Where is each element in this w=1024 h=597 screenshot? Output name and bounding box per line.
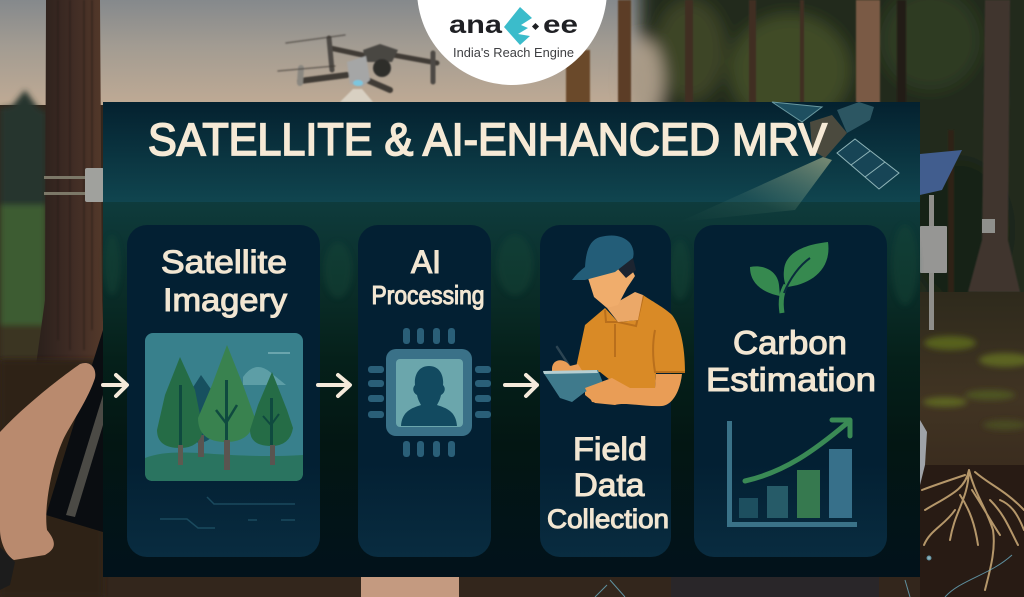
card: satellite imagery [127, 225, 320, 557]
panel forest band [103, 202, 920, 577]
right forest canopy [627, 0, 1024, 305]
cap [572, 235, 634, 280]
icon: seedling [750, 242, 828, 313]
card title: Satellite [161, 244, 287, 280]
circuit lines [160, 497, 295, 528]
face [588, 266, 635, 308]
logo tagline: India's Reach Engine [453, 46, 574, 60]
canopy texture [104, 225, 918, 305]
tablet [543, 370, 603, 402]
card title: Carbon [733, 324, 847, 361]
logo badge [417, 0, 607, 85]
ground left [0, 360, 103, 597]
arrow: to field data [505, 375, 537, 396]
ground right [920, 292, 1024, 472]
drone [278, 35, 437, 102]
card title line 2: Imagery [163, 282, 287, 318]
sky [0, 0, 680, 105]
logo dot [532, 23, 539, 30]
logo icon: teal diamond [504, 7, 532, 45]
soil with roots [920, 465, 1024, 597]
logo badge: ee [543, 11, 578, 39]
bar chart [727, 420, 857, 527]
card subtitle: Processing [372, 280, 484, 310]
card title: AI [411, 244, 441, 280]
left distant forest [0, 90, 46, 360]
card: carbon estimation [694, 225, 887, 557]
solar panel station [920, 150, 995, 330]
card title line 3: Collection [547, 504, 669, 534]
hair [617, 258, 636, 278]
icon: AI chip [368, 328, 491, 457]
shirt [575, 295, 685, 390]
arrow: into satellite imagery [103, 375, 127, 396]
card title line 2: Estimation [706, 361, 876, 398]
fingers [585, 378, 622, 404]
collar and seams [605, 296, 685, 372]
bottom figure [361, 575, 459, 597]
writing hand [552, 360, 583, 372]
heading: SATELLITE & AI-ENHANCED MRV [148, 114, 827, 165]
arrow: to AI processing [318, 375, 350, 396]
card: field data collection [540, 225, 685, 557]
card title line 2: Data [574, 467, 645, 503]
drone arms and body [278, 35, 437, 90]
icon: forest picture [145, 333, 303, 481]
glowing data lines [595, 555, 1012, 597]
holding arm [585, 374, 682, 406]
card title: Field [573, 431, 647, 467]
main panel [103, 102, 920, 577]
tree trunks, right [566, 0, 1020, 300]
left large trunk [36, 0, 104, 372]
pen [557, 347, 570, 367]
panel header band [103, 102, 920, 202]
satellite [679, 102, 899, 222]
card: AI processing [358, 225, 491, 557]
drone downward light [340, 89, 373, 102]
trend arrow [745, 420, 850, 481]
neck [607, 292, 643, 322]
logo wordmark: ana [449, 11, 503, 39]
phone and hand [0, 330, 103, 590]
sensor box on trunk [44, 168, 104, 202]
icon: field worker [543, 235, 685, 406]
